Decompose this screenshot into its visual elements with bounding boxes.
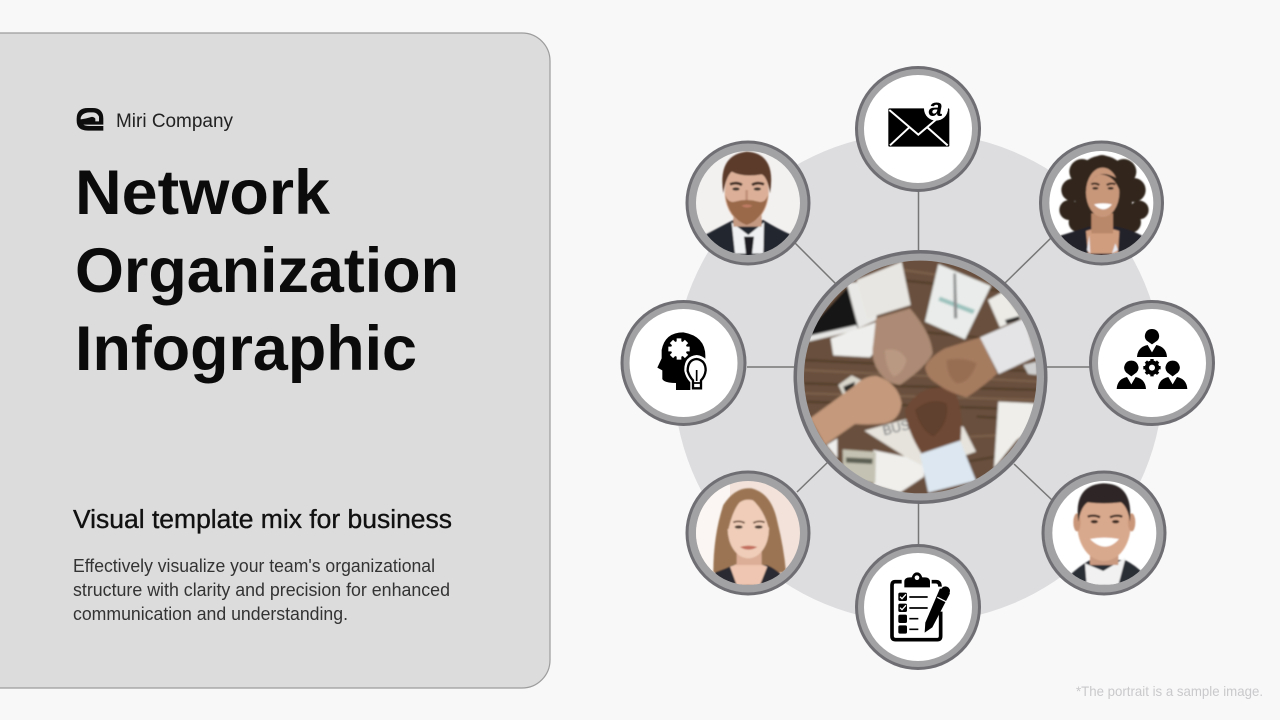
node: man portrait top left xyxy=(686,140,810,266)
subheading: Visual template mix for business xyxy=(73,506,452,534)
footnote: *The portrait is a sample image. xyxy=(1076,683,1263,699)
title: Infographic xyxy=(75,314,417,384)
left panel xyxy=(0,33,550,688)
description: Effectively visualize your team's organizational xyxy=(73,556,435,576)
node: clipboard checklist icon xyxy=(855,544,981,670)
title xyxy=(75,158,459,384)
backdrop circle xyxy=(674,132,1164,622)
title: Organization xyxy=(75,236,459,306)
network diagram xyxy=(620,66,1215,670)
node: head and lightbulb icon xyxy=(620,300,746,426)
description xyxy=(73,556,450,624)
title: Network xyxy=(75,158,331,228)
node: email icon: a xyxy=(929,94,943,122)
connector lines xyxy=(747,190,1090,546)
node: man portrait bottom right xyxy=(1042,470,1166,596)
node: woman portrait top right xyxy=(1039,140,1164,266)
node: team organization icon xyxy=(1089,300,1215,426)
node: email icon xyxy=(855,66,981,192)
company logo xyxy=(77,108,103,131)
description: communication and understanding. xyxy=(73,604,348,624)
company name: Miri Company xyxy=(116,111,233,132)
node: woman portrait bottom left xyxy=(686,470,810,596)
central photo: team fist bump: BUS xyxy=(881,417,911,438)
description: structure with clarity and precision for enhanced xyxy=(73,580,450,600)
central photo: team fist bump xyxy=(794,250,1048,504)
